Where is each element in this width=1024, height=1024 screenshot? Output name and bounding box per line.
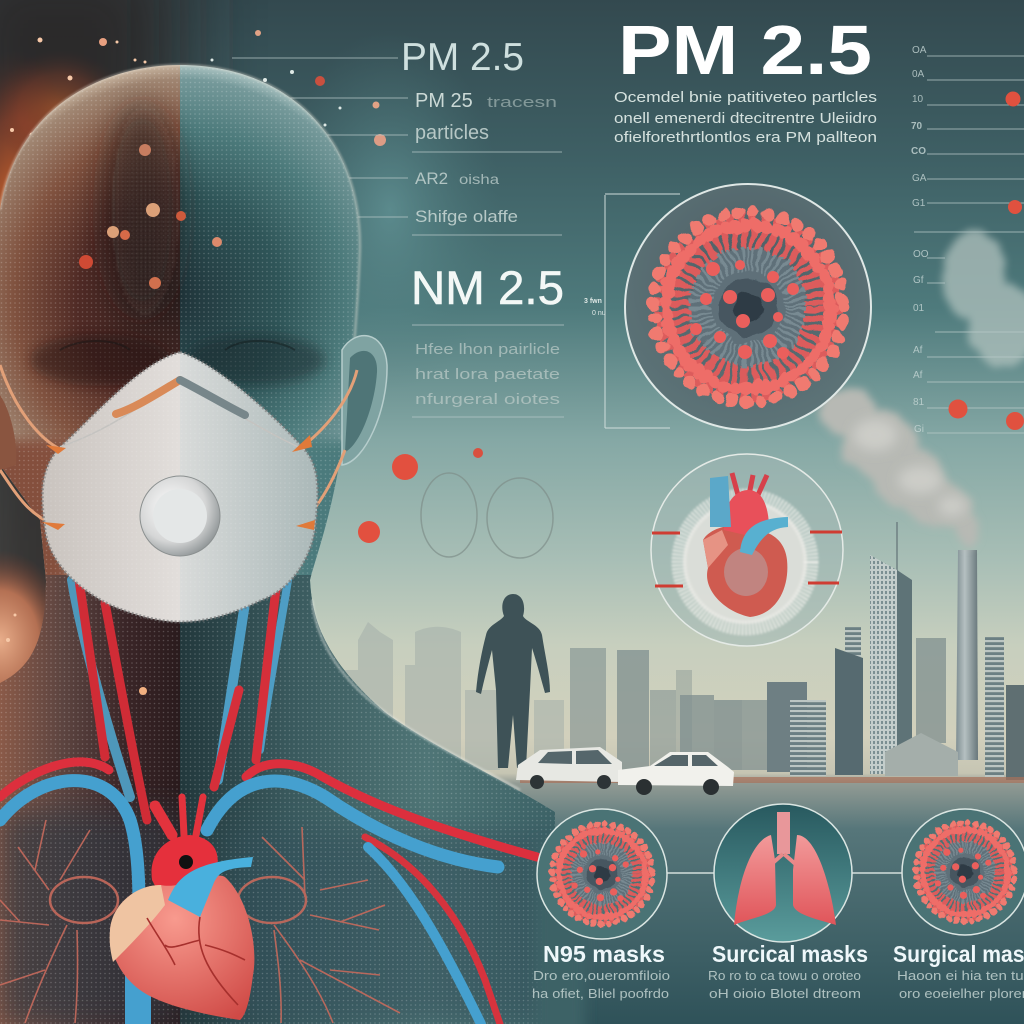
caption: N95 masks: N95 masks <box>543 941 665 967</box>
scale bracket <box>605 194 680 428</box>
strap clips <box>42 435 315 530</box>
label group: tracesn <box>487 94 557 111</box>
title description <box>614 89 877 146</box>
bottom circle virus 3 <box>902 809 1024 935</box>
person body <box>0 0 560 1024</box>
human silhouette <box>476 594 550 768</box>
caption: N95 masks: Dro ero,oueromfiloio <box>533 968 670 983</box>
N95 mask <box>40 350 320 622</box>
description text <box>415 341 560 408</box>
caption: N95 masks: ha ofiet, Bliel poofrdo <box>532 986 669 1001</box>
ear <box>342 336 387 465</box>
bottom circle virus 1 <box>537 809 667 939</box>
eye shadows <box>30 334 170 386</box>
floating red particles <box>358 448 483 543</box>
background smoke <box>943 230 1024 367</box>
right rule lines <box>914 56 1024 433</box>
label group <box>415 90 557 226</box>
caption: Surgical masks: Ro ro to ca towu o oroteo <box>708 968 861 983</box>
right tick labels: 01 <box>913 303 925 314</box>
main title: PM 2.5 <box>618 11 872 89</box>
sub heading: NM 2.5: NM 2.5 <box>411 261 564 314</box>
sparkling particles on head <box>79 144 222 695</box>
sub label: PM 2.5: PM 2.5 <box>401 36 524 79</box>
description text: Hfee lhon pairlicle <box>415 341 560 358</box>
right tick labels: G1 <box>912 198 926 209</box>
front building <box>790 700 826 776</box>
faint lung outlines <box>421 473 553 558</box>
left rule lines <box>232 58 564 417</box>
tall tower <box>870 522 912 774</box>
caption: N95 masks <box>532 941 670 1001</box>
bottom circle lungs <box>714 804 852 942</box>
title description: onell emenerdi dtecitrentre Uleiidro <box>614 110 877 127</box>
label group: Shifge olaffe <box>415 207 518 226</box>
label group: AR2 <box>415 169 448 188</box>
right tick labels: 70 <box>911 121 923 132</box>
caption: Surgical masks cut off: oro eoeielher plorem <box>899 986 1024 1001</box>
shoulder rim light <box>312 600 520 790</box>
neck and chest arteries <box>0 580 537 1024</box>
right tick labels: Gi <box>914 424 924 435</box>
lace disc <box>679 496 811 628</box>
virus large circle <box>625 184 871 430</box>
diagram heart body <box>703 526 787 617</box>
right tick labels: 10 <box>912 94 924 105</box>
description text: nfurgeral oiotes <box>415 391 560 408</box>
right tick labels: 81 <box>913 397 925 408</box>
car front <box>618 752 734 795</box>
right tick labels: 0A <box>912 69 925 80</box>
diagram ticks <box>652 532 842 586</box>
head rim light <box>0 65 360 440</box>
mask straps <box>0 365 357 525</box>
right tick labels: Gf <box>913 275 924 286</box>
title description: ofielforethrtlontlos era PM pallteon <box>614 129 877 146</box>
right tick labels: OO <box>913 249 929 260</box>
low building <box>885 733 958 776</box>
scale label <box>584 298 606 317</box>
smoke plume <box>820 388 977 548</box>
vein branches <box>0 820 400 1023</box>
right tick labels: OA <box>912 45 927 56</box>
chimney <box>956 550 978 760</box>
right tick labels: CO <box>911 146 926 157</box>
dark scatter on head <box>102 105 182 315</box>
caption: Surgical masks: Surcical masks <box>712 941 868 967</box>
right tick labels: Af <box>913 370 923 381</box>
right tick labels <box>911 45 929 435</box>
caption: Surgical masks cut off: Haoon ei hia ten tuu <box>897 968 1024 983</box>
right particles <box>948 92 1024 430</box>
jaw side shading <box>3 434 68 595</box>
title description: Ocemdel bnie patitiveteo partlcles <box>614 89 877 106</box>
caption: Surgical masks: oH oioio Blotel dtreom <box>709 986 861 1001</box>
heart diagram <box>651 454 843 646</box>
road <box>520 777 1024 783</box>
scale label: 3 fwn <box>584 298 602 305</box>
left ear edge <box>0 395 16 470</box>
left ember glow <box>0 0 500 740</box>
right tick labels: Af <box>913 345 923 356</box>
body right fade <box>535 840 585 1024</box>
caption: Surgical masks <box>708 941 868 1001</box>
valve <box>140 476 220 556</box>
neck and torso halves <box>0 575 180 1024</box>
label group: particles <box>415 122 489 144</box>
description text: hrat lora paetate <box>415 366 560 383</box>
scale label: 0 nu <box>592 310 606 317</box>
label group: PM 25 <box>415 90 473 112</box>
skyline <box>340 522 1024 780</box>
car rear <box>516 747 622 789</box>
bottom connectors <box>667 872 902 874</box>
nose clip <box>116 380 245 415</box>
right tick labels: GA <box>912 173 927 184</box>
central heart <box>110 797 254 1020</box>
head halves <box>0 65 180 590</box>
label group: oisha <box>459 171 499 187</box>
caption: Surgical masks cut off <box>893 941 1024 1001</box>
